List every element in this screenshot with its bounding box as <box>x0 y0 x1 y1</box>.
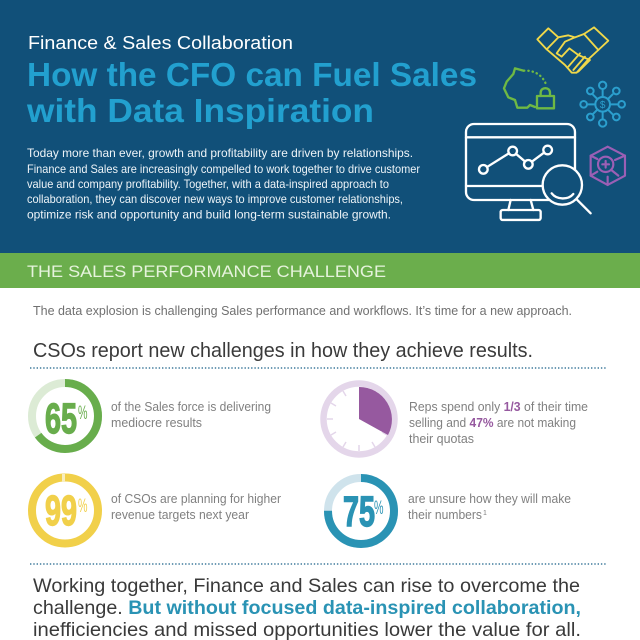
section intro text: The data explosion is challenging Sales performance and workflows. It’s time for a new approach. <box>33 303 572 318</box>
stat: 75 percent: % <box>374 498 384 519</box>
intro paragraph: Today more than ever, growth and profitability are driven by relationships. <box>27 146 413 160</box>
icon: monitor with line chart and magnifier <box>466 124 591 220</box>
main title: How the CFO can Fuel Sales <box>27 57 477 94</box>
intro paragraph: collaboration, they can discover new ways to improve customer relationships, <box>27 192 403 206</box>
stat: 75 percent: are unsure how they will make <box>408 492 571 506</box>
stat: 65 percent: % <box>78 403 88 424</box>
closing statement <box>33 575 581 640</box>
section heading: CSOs report new challenges in how they achieve results. <box>33 339 533 362</box>
stat: one third clock: Reps spend only 1/3 of their time <box>409 400 588 414</box>
stat: 99 percent: of CSOs are planning for higher <box>111 492 281 506</box>
section banner <box>0 253 640 288</box>
header panel <box>0 0 640 253</box>
stat: 75 percent: 75 <box>343 488 375 536</box>
stat: 65 percent: of the Sales force is delivering <box>111 400 271 414</box>
stat: 75 percent <box>328 478 571 544</box>
intro paragraph: Finance and Sales are increasingly compelled to work together to drive customer <box>27 162 420 176</box>
intro paragraph: value and company profitability. Together, with a data-inspired approach to <box>27 177 389 191</box>
subtitle: Finance & Sales Collaboration <box>28 32 293 53</box>
section banner: THE SALES PERFORMANCE CHALLENGE <box>27 262 386 281</box>
intro paragraph <box>27 146 420 222</box>
main title <box>26 57 477 130</box>
intro paragraph: optimize risk and opportunity and build long-term sustainable growth. <box>27 208 391 222</box>
icon: cube with magnifier <box>591 147 625 185</box>
stat: 65 percent: mediocre results <box>111 416 202 430</box>
icon: piggy bank with lock <box>504 68 554 108</box>
icon: dollar network <box>580 82 625 127</box>
stat: 75 percent: their numbers <box>408 508 482 522</box>
stat: 99 percent <box>32 474 281 544</box>
stat: 65 percent <box>32 383 271 449</box>
icon: dollar network: $ <box>600 100 606 111</box>
stat: 75 percent: 1 <box>483 510 487 517</box>
stat: 99 percent: revenue targets next year <box>111 508 249 522</box>
closing statement: challenge. But without focused data-inspired collaboration, <box>33 597 581 619</box>
main title: with Data Inspiration <box>26 93 374 130</box>
stat: one third clock <box>324 384 588 454</box>
stat: 99 percent: % <box>78 496 88 517</box>
stat: one third clock: selling and 47% are not making <box>409 416 576 430</box>
stat: one third clock: their quotas <box>409 432 474 446</box>
stat: 99 percent: 99 <box>45 487 77 535</box>
closing statement: Working together, Finance and Sales can rise to overcome the <box>33 575 580 597</box>
stat: 65 percent: 65 <box>45 395 77 443</box>
icon: handshake <box>537 27 608 73</box>
